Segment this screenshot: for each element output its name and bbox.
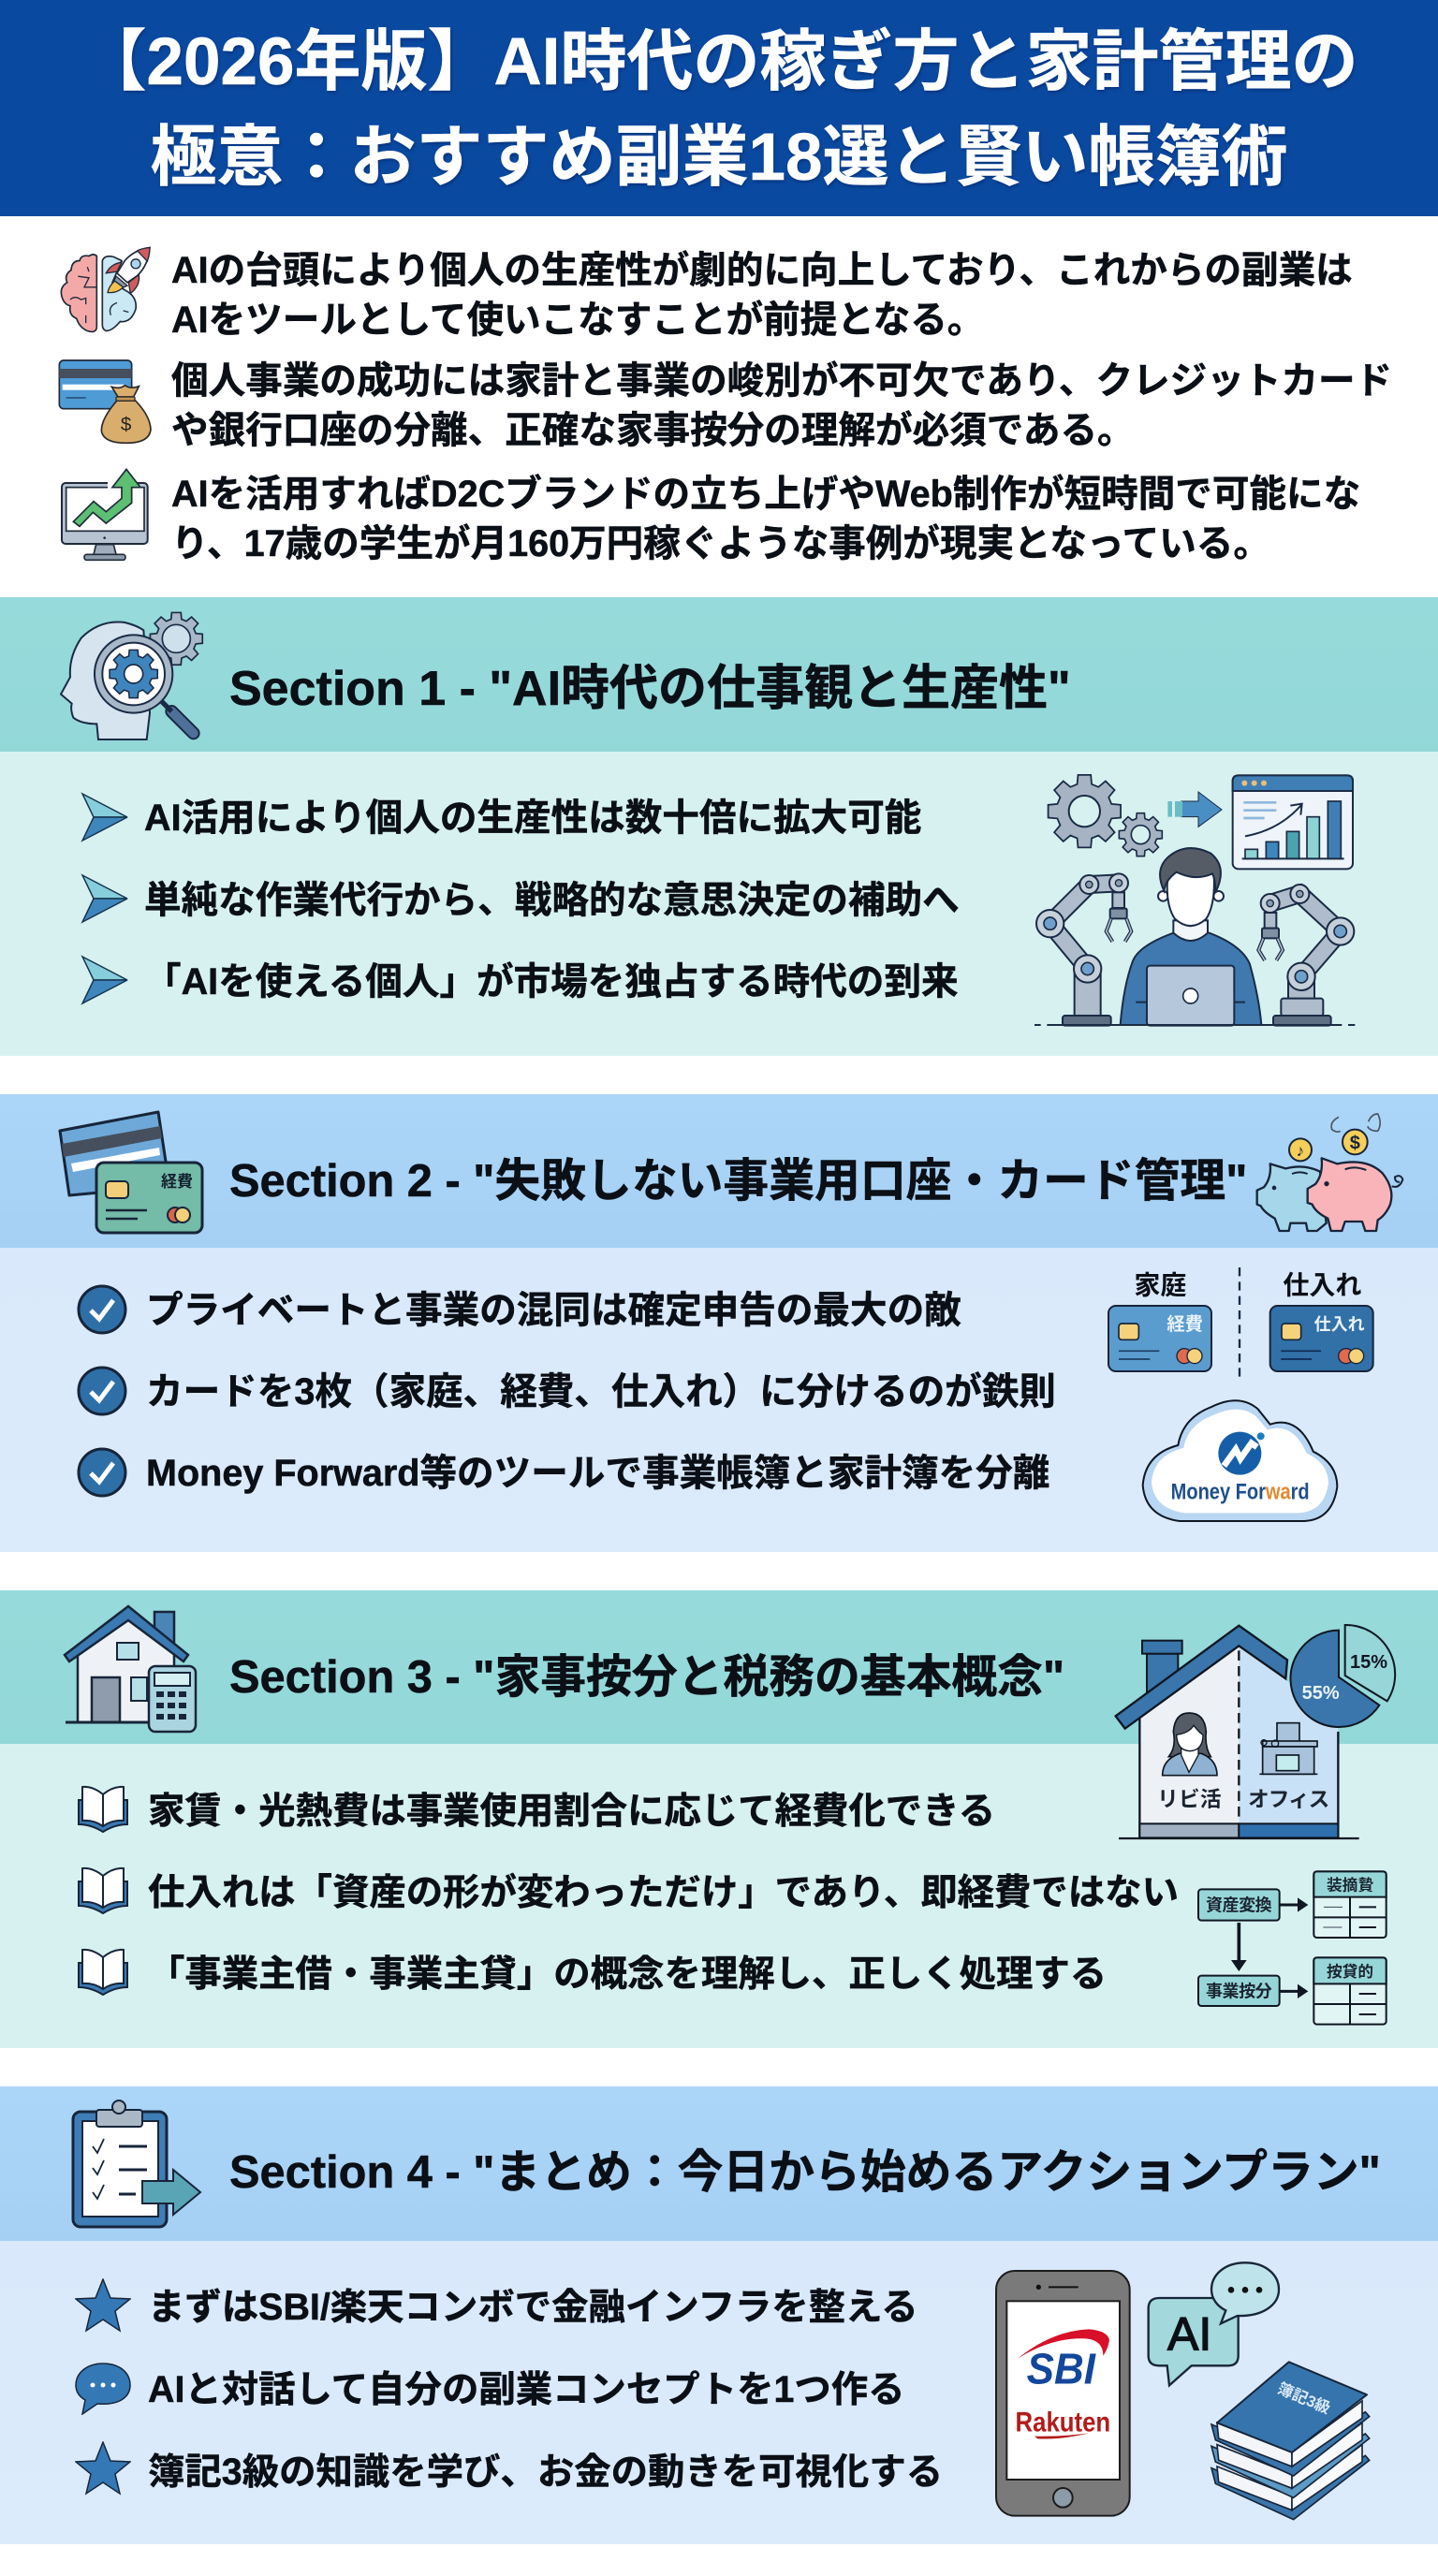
icon: expense credit cards — [58, 1110, 204, 1234]
bullet book 3 — [78, 1949, 128, 1996]
section 3 heading: Section 3 - "家事按分と税務の基本概念" — [229, 1652, 1064, 1703]
bullet 1: 家賃・光熱費は事業使用割合に応じて経費化できる — [148, 1791, 995, 1832]
bullet 3: 「AIを使える個人」が市場を独占する時代の到来 — [144, 961, 959, 1003]
illustration: home office split, pie chart and flow — [1114, 1624, 1397, 2026]
icon: monitor with rising arrow — [61, 468, 149, 562]
bullet 1: プライベートと事業の混同は確定申告の最大の敵 — [146, 1290, 961, 1331]
bullet book 1 — [78, 1786, 128, 1833]
bullet check 1 — [77, 1284, 127, 1335]
bullet 3: Money Forward等のツールで事業帳簿と家計簿を分離 — [146, 1453, 1049, 1494]
bullet arrow 2 — [81, 873, 127, 924]
illustration: separated cards and Money Forward cloud — [1108, 1267, 1374, 1522]
illustration: home office split, pie chart and flow: リビ活 — [1157, 1787, 1221, 1811]
section 1 body — [0, 752, 1438, 1056]
section 4 body — [0, 2241, 1438, 2544]
section 1 heading: Section 1 - "AI時代の仕事観と生産性" — [229, 662, 1071, 716]
intro point 2 — [171, 360, 1392, 451]
illustration: home office split, pie chart and flow: 55% — [1302, 1683, 1340, 1704]
intro point 1: AIの台頭により個人の生産性が劇的に向上しており、これからの副業は — [171, 250, 1353, 291]
icon: piggy banks and coins: $ — [1350, 1133, 1360, 1153]
panel: section 2 — [0, 1094, 1438, 1552]
illustration: home office split, pie chart and flow: オフィス — [1248, 1787, 1329, 1811]
bullet 3: 簿記3級の知識を学び、お金の動きを可視化する — [148, 2452, 943, 2493]
panel: section 1 — [0, 597, 1438, 1056]
illustration: home office split, pie chart and flow: 事業按分 — [1206, 1982, 1272, 2000]
bullet arrow 3 — [81, 955, 127, 1005]
title line 1: 【2026年版】AI時代の稼ぎ方と家計管理の — [81, 25, 1357, 99]
illustration: home office split, pie chart and flow: 按貸的 — [1327, 1962, 1373, 1981]
illustration: separated cards and Money Forward cloud: 仕入れ — [1314, 1315, 1365, 1334]
illustration: separated cards and Money Forward cloud: 家庭 — [1134, 1271, 1186, 1300]
bullet speech bubble — [75, 2363, 131, 2415]
intro point 1: AIをツールとして使いこなすことが前提となる。 — [171, 300, 984, 341]
intro point 1 — [171, 250, 1353, 341]
illustration: separated cards and Money Forward cloud: Money Forward — [1171, 1480, 1310, 1505]
illustration: worker with robot arms, gears and chart — [1034, 774, 1356, 1027]
icon: card and money bag — [58, 359, 152, 444]
section 2 body — [0, 1248, 1438, 1552]
bullet check 2 — [77, 1367, 127, 1415]
title banner — [0, 0, 1438, 216]
icon: head with magnifier and gears — [60, 612, 204, 740]
bullet 2: 仕入れは「資産の形が変わっただけ」であり、即経費ではない — [148, 1872, 1179, 1913]
section 2 header band — [0, 1094, 1438, 1248]
illustration: phone with bank logos, AI chat and textbooks — [995, 2261, 1371, 2521]
bullet 2: カードを3枚（家庭、経費、仕入れ）に分けるのが鉄則 — [146, 1371, 1056, 1412]
illustration: phone with bank logos, AI chat and textbooks: SBI — [1027, 2345, 1096, 2393]
section 3 header band — [0, 1590, 1438, 1744]
illustration: separated cards and Money Forward cloud: 仕入れ — [1283, 1271, 1361, 1300]
bullet book 2 — [78, 1866, 128, 1915]
icon: checklist clipboard with arrow — [71, 2100, 202, 2228]
panel: section 3 — [0, 1590, 1438, 2048]
bullet star 1 — [75, 2278, 131, 2333]
icon: piggy banks and coins: ♪ — [1297, 1141, 1304, 1160]
intro point 2: や銀行口座の分離、正確な家事按分の理解が必須である。 — [171, 410, 1135, 451]
intro panel — [0, 216, 1438, 597]
intro point 3 — [171, 474, 1360, 564]
illustration: separated cards and Money Forward cloud: 経費 — [1167, 1314, 1203, 1335]
illustration: home office split, pie chart and flow: 15% — [1350, 1652, 1387, 1673]
intro point 3: り、17歳の学生が月160万円稼ぐような事例が現実となっている。 — [171, 523, 1270, 564]
bullet 1: AI活用により個人の生産性は数十倍に拡大可能 — [144, 798, 921, 839]
illustration: home office split, pie chart and flow: 装摘贄 — [1327, 1876, 1373, 1894]
section 2 heading: Section 2 - "失敗しない事業用口座・カード管理" — [229, 1156, 1247, 1207]
icon: piggy banks and coins — [1256, 1113, 1404, 1232]
icon: expense credit cards: 経費 — [161, 1173, 193, 1191]
intro point 2: 個人事業の成功には家計と事業の峻別が不可欠であり、クレジットカード — [171, 360, 1392, 402]
bullet 3: 「事業主借・事業主貸」の概念を理解し、正しく処理する — [148, 1954, 1107, 1995]
title line 2: 極意：おすすめ副業18選と賢い帳簿術 — [150, 121, 1287, 195]
bullet arrow 1 — [81, 792, 127, 842]
icon: brain and rocket — [60, 247, 151, 333]
section 4 heading: Section 4 - "まとめ：今日から始めるアクションプラン" — [229, 2147, 1381, 2198]
bullet 1: まずはSBI/楽天コンボで金融インフラを整える — [148, 2287, 918, 2328]
bullet 2: AIと対話して自分の副業コンセプトを1つ作る — [148, 2369, 905, 2410]
illustration: phone with bank logos, AI chat and textbooks: 簿記3級 — [1275, 2379, 1333, 2418]
illustration: home office split, pie chart and flow: 資産変換 — [1206, 1895, 1272, 1914]
illustration: phone with bank logos, AI chat and textbooks: Rakuten — [1015, 2407, 1110, 2437]
bullet check 3 — [77, 1447, 127, 1498]
section 1 header band — [0, 597, 1438, 752]
panel: section 4 — [0, 2086, 1438, 2544]
illustration: phone with bank logos, AI chat and textbooks: AI — [1167, 2308, 1211, 2361]
bullet 2: 単純な作業代行から、戦略的な意思決定の補助へ — [144, 880, 960, 921]
bullet star 3 — [75, 2441, 131, 2496]
icon: card and money bag: $ — [121, 414, 132, 435]
section 3 body — [0, 1744, 1438, 2048]
section 4 header band — [0, 2086, 1438, 2241]
icon: house and calculator — [63, 1604, 197, 1734]
intro point 3: AIを活用すればD2Cブランドの立ち上げやWeb制作が短時間で可能にな — [171, 474, 1360, 515]
